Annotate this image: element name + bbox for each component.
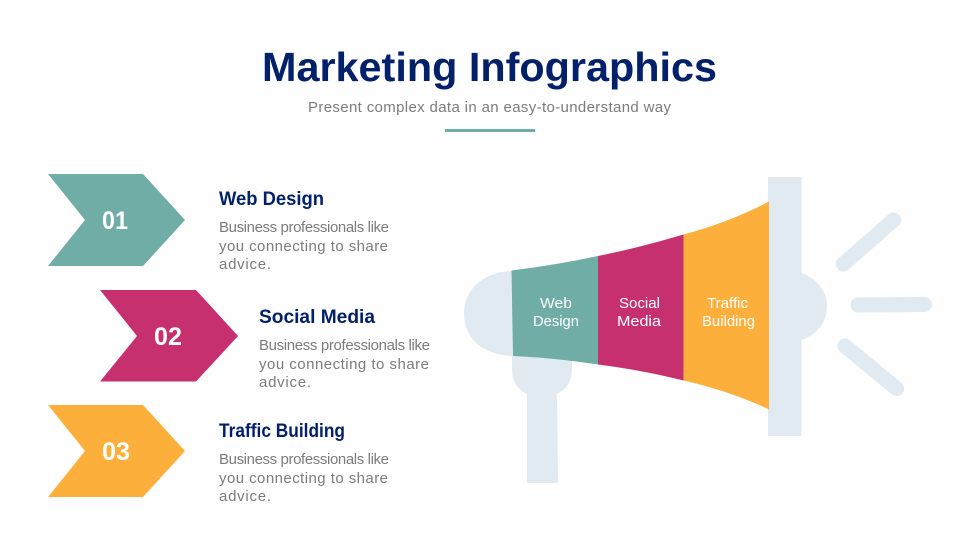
ray: middle <box>858 297 924 312</box>
description: web design: advice. <box>219 256 271 273</box>
megaphone front bar <box>768 177 802 436</box>
number 02: 02 <box>154 323 182 351</box>
chevron 02 <box>100 290 238 382</box>
subtitle: Present complex data in an easy-to-understand way <box>308 99 672 116</box>
chevron 01 <box>48 174 185 266</box>
segment: social media: Media <box>617 313 662 330</box>
description: web design: you connecting to share <box>219 238 388 255</box>
segment: traffic building: Building <box>702 313 755 330</box>
chevron 03 <box>48 405 185 497</box>
item 03: traffic building <box>48 405 389 505</box>
megaphone front cap <box>801 273 827 340</box>
description: social media: advice. <box>259 374 311 391</box>
megaphone back cap <box>464 271 513 356</box>
description: social media: Business professionals like <box>259 337 430 354</box>
ray: top <box>844 220 894 264</box>
description: social media <box>259 337 430 391</box>
description: social media: you connecting to share <box>259 356 429 373</box>
ray: bottom <box>845 346 896 388</box>
description: web design <box>219 219 389 273</box>
item 01: web design <box>48 174 389 273</box>
description: traffic building <box>219 451 389 505</box>
description: traffic building: you connecting to share <box>219 470 388 487</box>
description: traffic building: Business professionals like <box>219 451 389 468</box>
description: traffic building: advice. <box>219 488 271 505</box>
heading: traffic building: Traffic Building <box>219 421 345 442</box>
description: web design: Business professionals like <box>219 219 389 236</box>
segment: social media: Social <box>619 295 660 312</box>
megaphone <box>464 177 827 483</box>
title underline <box>445 129 535 132</box>
segment: traffic building: Traffic <box>707 295 748 312</box>
number 01: 01 <box>102 207 128 235</box>
segment: web design: Web <box>540 295 572 312</box>
title: Marketing Infographics <box>262 44 717 90</box>
segment: social media <box>598 234 684 380</box>
heading: web design: Web Design <box>219 189 324 210</box>
segment: traffic building <box>684 202 769 410</box>
sound rays <box>844 220 924 388</box>
heading: social media: Social Media <box>259 307 375 328</box>
segment: web design <box>512 256 598 364</box>
segment: web design: Design <box>533 313 579 330</box>
megaphone handle <box>512 356 572 483</box>
number 03: 03 <box>102 438 130 466</box>
item 02: social media <box>100 290 430 391</box>
